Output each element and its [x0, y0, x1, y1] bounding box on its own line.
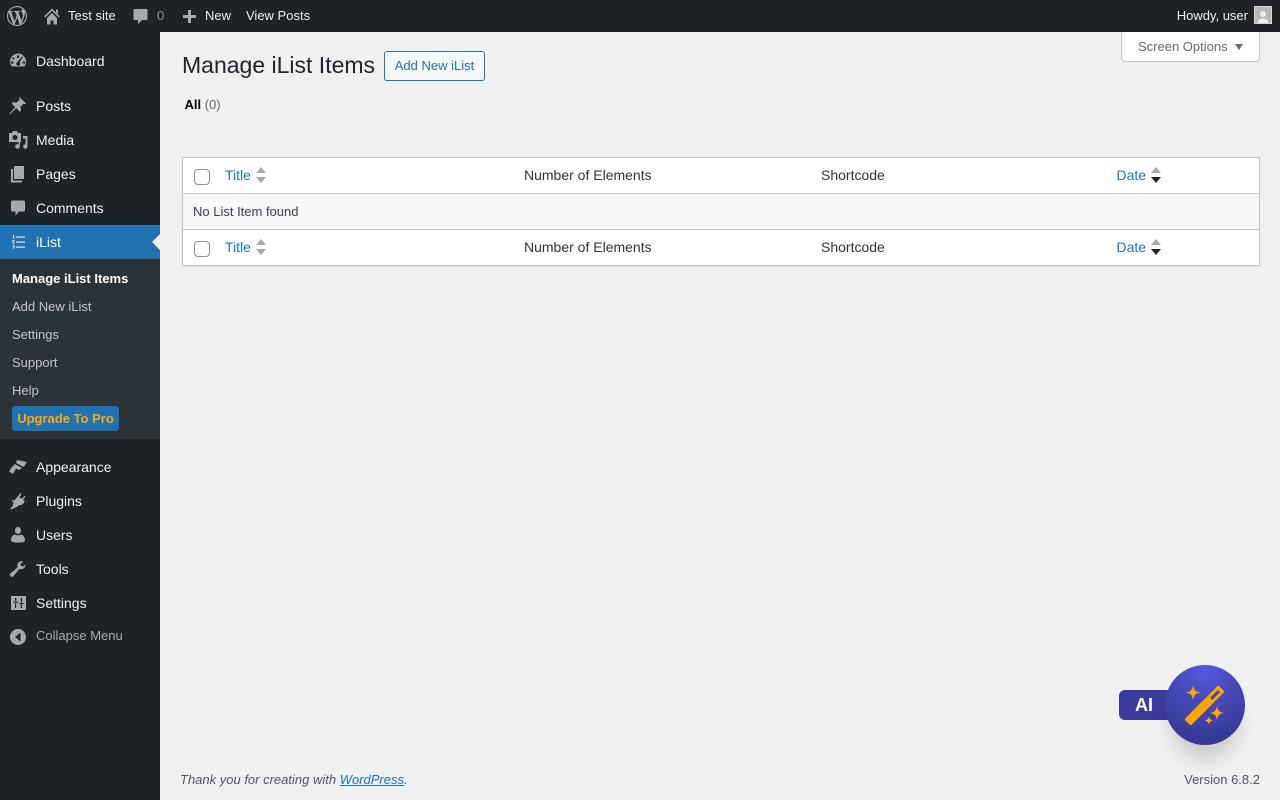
new link: New [205, 8, 231, 23]
active pointer [152, 234, 160, 250]
menu: Plugins: Plugins [36, 493, 82, 509]
footer version: Version 6.8.2 [1184, 772, 1260, 787]
select all checkbox [194, 169, 210, 185]
table header row [183, 158, 1259, 194]
submenu: Support: Support [12, 355, 58, 370]
column: Shortcode: Shortcode [821, 239, 885, 255]
collapse menu [10, 628, 123, 645]
admin sidebar [0, 32, 160, 800]
menu: Dashboard: Dashboard [36, 53, 104, 69]
column: Number of Elements: Number of Elements [524, 167, 652, 183]
AI label [1119, 690, 1179, 720]
column: Date: Date [1116, 167, 1146, 183]
menu: Media: Media [36, 132, 74, 148]
column: Title: Title [225, 167, 251, 183]
comment count: 0 [157, 8, 164, 23]
list table [182, 157, 1260, 266]
sort arrows: Title [256, 239, 266, 255]
sort arrows: Date [1151, 167, 1161, 183]
menu: Pages [11, 166, 76, 182]
avatar [1254, 6, 1272, 24]
admin top bar [0, 0, 1280, 32]
menu: Posts: Posts [36, 98, 71, 114]
column: Title: Title [225, 239, 251, 255]
column: Shortcode: Shortcode [821, 167, 885, 183]
submenu: Help: Help [12, 383, 39, 398]
add new button: Add New iList [395, 58, 474, 73]
floating AI button [1119, 665, 1245, 764]
greeting: Howdy, user [1177, 8, 1248, 23]
icon: WordPress logo [7, 6, 27, 26]
iList submenu [0, 259, 160, 439]
empty message row [183, 194, 1259, 230]
submenu: Manage iList Items: Manage iList Items [12, 271, 128, 286]
menu: Media [9, 131, 74, 149]
icon: plus [183, 10, 196, 23]
sort arrows: Title [256, 167, 266, 183]
add new button [384, 51, 485, 81]
upgrade button [12, 406, 119, 431]
menu: Plugins [10, 493, 82, 510]
select all checkbox [194, 241, 210, 257]
icon: comments [134, 9, 148, 24]
menu: Tools [10, 561, 69, 577]
menu: iList (active) [0, 225, 160, 259]
collapse menu: Collapse Menu [36, 628, 123, 643]
empty message row: No List Item found [193, 204, 298, 219]
menu: iList (active): iList [36, 234, 61, 250]
filter: all count: All (0) [184, 97, 221, 112]
column: Date: Date [1116, 239, 1146, 255]
menu: Appearance: Appearance [36, 459, 112, 475]
menu: Users: Users [36, 527, 73, 543]
page heading: Manage iList Items [182, 52, 375, 78]
submenu: Settings: Settings [12, 327, 59, 342]
table footer row [194, 239, 1161, 257]
column: Number of Elements: Number of Elements [524, 239, 652, 255]
submenu: Add New iList: Add New iList [12, 299, 91, 314]
menu: Settings: Settings [36, 595, 87, 611]
screen options tab [1121, 32, 1260, 62]
view posts link: View Posts [246, 8, 310, 23]
sort arrows: Date [1151, 239, 1161, 255]
screen options tab: Screen Options [1138, 39, 1228, 54]
AI label: AI [1135, 695, 1153, 715]
site name: Test site [68, 8, 116, 23]
menu: Tools: Tools [36, 561, 69, 577]
menu: Users [11, 527, 73, 543]
AI circle with wand icon [1166, 665, 1245, 764]
menu: Posts [9, 97, 71, 114]
menu: Settings [11, 595, 87, 611]
footer thanks: Thank you for creating with WordPress. [180, 772, 408, 787]
upgrade button: Upgrade To Pro [17, 411, 114, 426]
icon: home [44, 8, 60, 24]
menu: Pages: Pages [36, 166, 76, 182]
menu: Comments: Comments [36, 200, 104, 216]
